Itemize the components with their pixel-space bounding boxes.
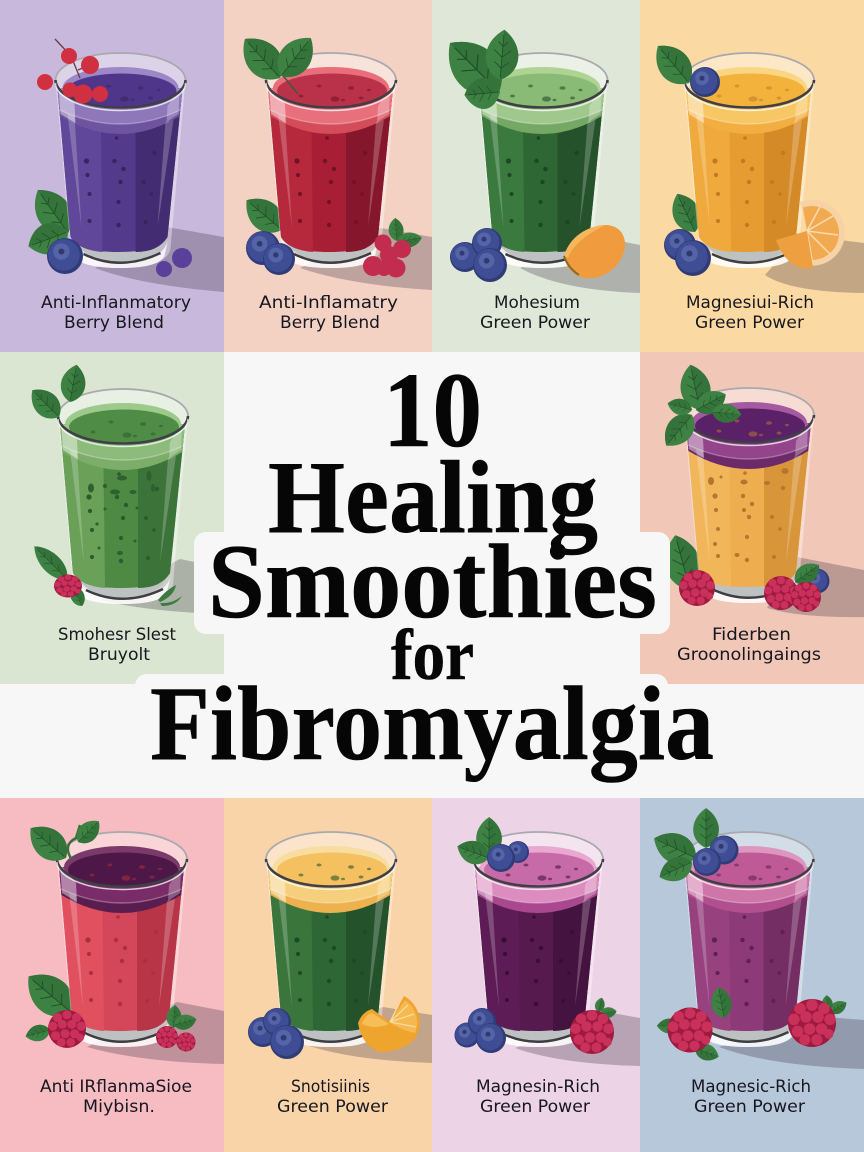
label — [41, 293, 191, 333]
lower leaves — [28, 540, 74, 586]
glass: green and yellow smoothie — [266, 832, 396, 1047]
lower leaves — [23, 180, 82, 261]
lower leaf — [658, 531, 707, 595]
garnish: leaves, blueberries, raspberries — [232, 28, 423, 278]
lower leaves — [17, 963, 84, 1044]
label — [259, 293, 398, 333]
label: Green Power — [695, 313, 804, 333]
panel: orange magnesium — [640, 0, 864, 352]
garnish: leaves and raspberries — [21, 815, 198, 1052]
label: Mohesium — [494, 293, 580, 313]
glass: magenta smoothie — [684, 832, 814, 1047]
panel: purple anti-inflammatory berry blend — [0, 0, 224, 352]
panel: red berry blend — [224, 0, 432, 352]
label: Green Power — [694, 1097, 805, 1117]
lower leaf — [665, 188, 707, 238]
panel: green smoothie with yellow top — [224, 798, 432, 1152]
title: Fibromyalgia — [150, 665, 714, 782]
label — [691, 1077, 811, 1117]
glass: purple smoothie — [56, 53, 186, 268]
garnish: leaves, blueberries, raspberry — [454, 817, 617, 1054]
garnish: leaves, blueberries, raspberries — [648, 808, 849, 1064]
garnish: leaves and raspberry — [24, 363, 182, 609]
title — [150, 352, 714, 782]
label: Smohesr Slest — [58, 625, 176, 645]
label — [480, 293, 590, 333]
glass: red smoothie — [266, 53, 396, 268]
garnish: leaves, blueberries, orange — [434, 27, 625, 282]
label: Magnesin-Rich — [476, 1077, 600, 1097]
glass: purple over orange smoothie — [684, 388, 814, 603]
label: Groonolingaings — [677, 645, 821, 665]
label — [58, 625, 176, 665]
label: Bruyolt — [88, 645, 150, 665]
garnish: red currants and blueberries — [37, 39, 192, 277]
title: Smoothies — [208, 523, 657, 640]
label: Snotisiinis — [291, 1077, 370, 1097]
label: Anti-Inflanmatory — [41, 293, 191, 313]
label — [677, 625, 821, 665]
label: Berry Blend — [280, 313, 380, 333]
glass: dark purple smoothie — [473, 832, 603, 1047]
panel: green power — [432, 0, 640, 352]
label: Anti-Inflamatry — [259, 293, 398, 313]
panel: speckled green smoothie — [0, 352, 224, 684]
label: Berry Blend — [64, 313, 164, 333]
label: Miybisn. — [83, 1097, 155, 1117]
panel: magenta smoothie — [640, 798, 864, 1152]
label — [686, 293, 814, 333]
label: Green Power — [480, 313, 590, 333]
panel: layered purple and orange smoothie — [640, 352, 864, 684]
lower leaf — [237, 189, 292, 241]
glass: speckled green smoothie — [58, 389, 188, 604]
label — [476, 1077, 600, 1117]
garnish: blueberries and orange slice — [248, 996, 420, 1059]
panel: dark purple smoothie — [432, 798, 640, 1152]
label — [40, 1077, 192, 1117]
label: Fiderben — [712, 625, 791, 645]
label — [277, 1077, 388, 1117]
label: Anti IRflanmaSioe — [40, 1077, 192, 1097]
garnish: leaf, blueberries, orange slice — [646, 36, 845, 276]
label: Green Power — [480, 1097, 590, 1117]
title: Healing — [268, 440, 598, 555]
title panel: white centre shape — [0, 352, 864, 798]
title: 10 — [383, 352, 482, 470]
label: Magnesic-Rich — [691, 1077, 811, 1097]
glass: orange smoothie — [684, 53, 814, 268]
glass: red and purple smoothie — [57, 832, 187, 1047]
label: Green Power — [277, 1097, 388, 1117]
label: Magnesiui-Rich — [686, 293, 814, 313]
glass: green smoothie — [478, 53, 608, 268]
panel: red smoothie with purple top — [0, 798, 224, 1152]
garnish: mint leaves, raspberries, blueberry — [657, 362, 830, 612]
title: for — [391, 615, 474, 695]
